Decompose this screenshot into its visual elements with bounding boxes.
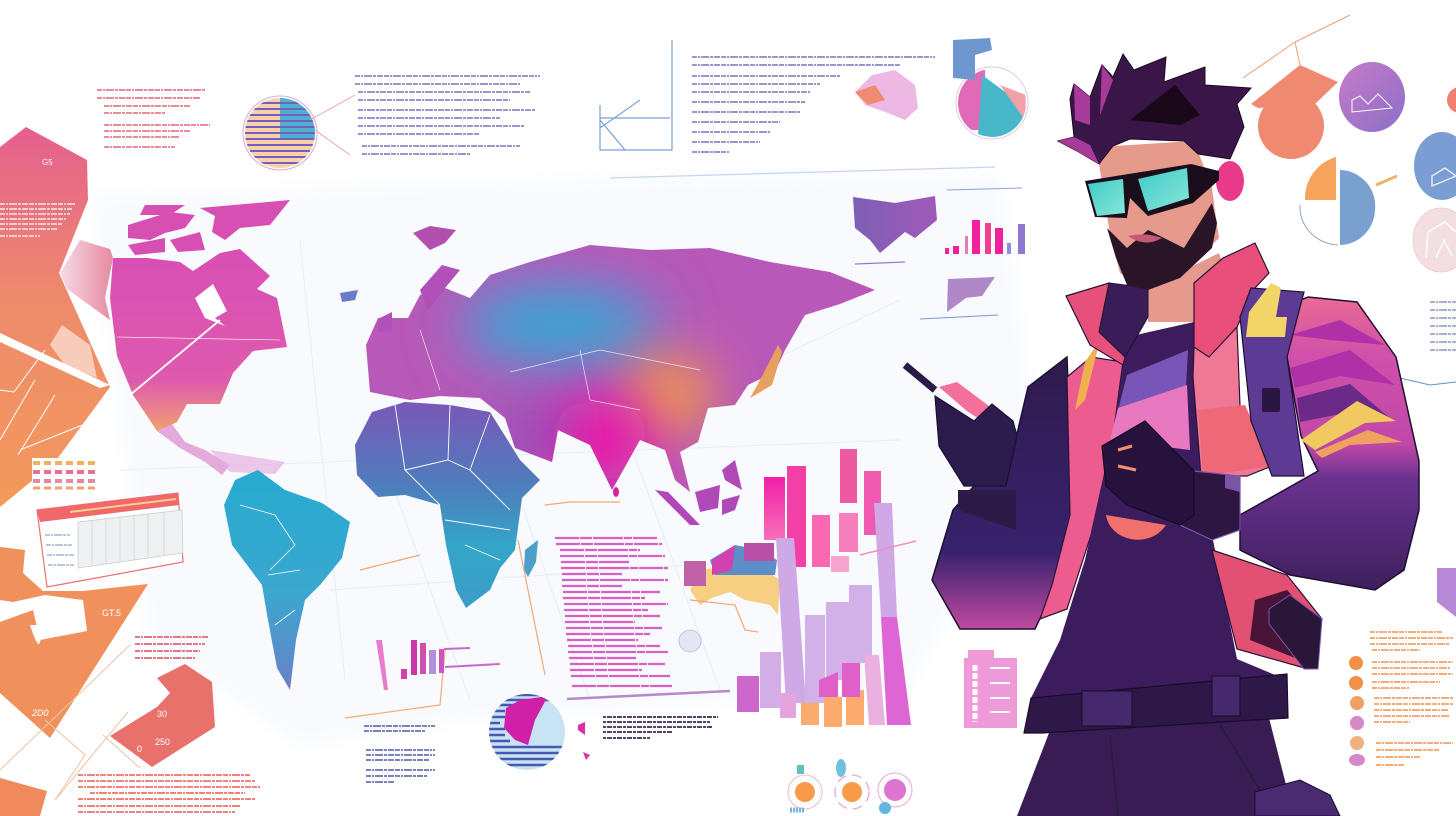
- pink bars: [764, 449, 881, 572]
- text block: top centre blue: [692, 57, 935, 152]
- map backdrop panel: [90, 175, 1040, 745]
- holster: [1255, 780, 1340, 816]
- collar right: [1194, 243, 1269, 357]
- jacket pouch: [1269, 595, 1322, 669]
- world map: [60, 200, 890, 690]
- mini bar chart: [376, 640, 500, 690]
- text block: left of map red: [135, 637, 208, 658]
- australia: [684, 543, 780, 615]
- southeast asia islands: [655, 460, 742, 525]
- africa: [355, 402, 540, 608]
- panel: bottom left orange corner: [0, 778, 47, 816]
- purple circle icon: [1339, 62, 1405, 132]
- left hand with device: [905, 365, 1017, 530]
- eurasia: [366, 245, 875, 492]
- shirt: [1030, 322, 1287, 700]
- connector lines: [345, 502, 758, 718]
- list icons: [1349, 656, 1365, 766]
- character: cyberpunk presenter: [905, 54, 1419, 816]
- blue circle icon: [1414, 132, 1456, 200]
- hexagon label: G5: [42, 158, 53, 167]
- orange list: [1349, 632, 1453, 766]
- glasses: [1085, 164, 1219, 218]
- right jacket panel: [1193, 327, 1272, 476]
- line graph frame: [600, 40, 995, 178]
- scandinavia and uk: [378, 265, 460, 332]
- lower right jacket: [1212, 550, 1322, 669]
- faint pink circle icon: [1413, 208, 1456, 272]
- panel: red hexagon: [110, 664, 215, 767]
- text block: bottom red: [78, 775, 260, 812]
- left sleeve: [932, 357, 1077, 629]
- top right shapes: [1243, 15, 1456, 272]
- earpiece: [1216, 161, 1244, 201]
- central america: [157, 424, 230, 475]
- south america: [224, 470, 350, 690]
- face: [1099, 141, 1219, 288]
- lavender bars: [760, 503, 911, 725]
- quarter pie: [1300, 157, 1397, 245]
- red partial circle: [1447, 87, 1456, 113]
- sri lanka: [613, 487, 619, 497]
- orange block label: GT.5: [102, 608, 121, 618]
- panel: left pink hexagon: [0, 127, 110, 507]
- neck: [1148, 253, 1226, 322]
- data table card: [37, 493, 183, 587]
- text block: bottom left blue: [364, 726, 435, 782]
- panel: lower orange block: 2D0: [31, 708, 49, 718]
- globe: top right teal: [953, 38, 1030, 140]
- collar left: [1099, 283, 1148, 357]
- right hand glove and cuff: [1102, 421, 1240, 540]
- globe: top left striped: [243, 95, 355, 170]
- text block: top blue: [355, 76, 540, 154]
- left jacket panel: [1040, 357, 1123, 619]
- text block: top left red: [97, 90, 210, 147]
- main bar chart: [737, 449, 916, 727]
- text block: main centre list: [555, 538, 730, 699]
- text block: dark caption: [603, 717, 718, 738]
- north america: [60, 200, 290, 431]
- belt: [1024, 674, 1288, 733]
- backpack strap: [1240, 288, 1304, 476]
- right sleeve: [1240, 297, 1419, 590]
- small donut icons: [788, 759, 912, 814]
- magenta and orange bars: [737, 663, 864, 727]
- panel: lower orange block: [0, 547, 148, 738]
- beard: [1107, 203, 1217, 290]
- colour swatch grid: [32, 458, 98, 492]
- red hexagon values: 30: [157, 709, 167, 719]
- pink report card: [964, 650, 1017, 728]
- panel: red hexagon: 250: [155, 737, 170, 747]
- text block: right small: [1430, 302, 1456, 350]
- purple tab: [1437, 568, 1456, 617]
- fingerprint globe icon: [679, 630, 701, 652]
- globe: bottom striped: [489, 694, 590, 770]
- small pink map: [855, 70, 918, 120]
- hair: [1058, 54, 1251, 164]
- japan: [750, 345, 782, 398]
- pants: [1017, 718, 1294, 816]
- map: purple territory and bars: [853, 188, 1025, 319]
- panel: red hexagon: 0: [137, 744, 142, 754]
- orange flag and circle: [1243, 15, 1350, 159]
- greenland: [413, 226, 456, 250]
- small bar chart: [945, 220, 1025, 254]
